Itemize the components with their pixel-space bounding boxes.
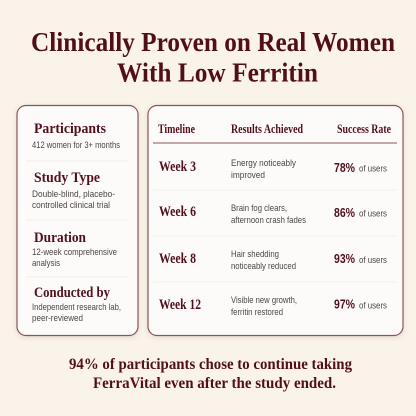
row: week 6: Brain fog clears, — [231, 203, 287, 213]
table header: Success Rate — [337, 122, 391, 136]
duration — [32, 230, 117, 268]
row: week 8: Week 8 — [159, 251, 196, 267]
row: week 12: Week 12 — [159, 297, 201, 313]
row: week 8: noticeably reduced — [231, 261, 296, 271]
table header: Timeline — [158, 122, 195, 136]
row: week 8: Hair shedding — [231, 249, 279, 259]
study type: Study Type — [34, 170, 101, 186]
row: week 12: Visible new growth, — [231, 295, 297, 305]
row: week 6: Week 6 — [159, 204, 196, 220]
row: week 12: 97% — [334, 298, 355, 312]
footer callout: FerraVital even after the study ended. — [93, 375, 336, 392]
row: week 3: of users — [359, 164, 387, 174]
table header — [158, 122, 391, 136]
row: week 8: of users — [359, 255, 387, 265]
conducted by: peer-reviewed — [32, 313, 83, 323]
row: week 8 — [159, 249, 387, 271]
participants — [32, 121, 120, 150]
title: With Low Ferritin — [117, 56, 318, 88]
conducted by — [32, 285, 121, 323]
participants: 412 women for 3+ months — [32, 140, 120, 150]
duration: 12-week comprehensive — [32, 247, 117, 257]
duration: Duration — [34, 230, 86, 246]
row: week 6: of users — [359, 208, 387, 218]
row: week 3: 78% — [334, 161, 355, 175]
panel: study details — [17, 106, 138, 336]
participants: Participants — [34, 121, 106, 137]
row: week 12: of users — [359, 300, 387, 310]
footer callout: 94% of participants chose to continue taking — [69, 356, 352, 373]
duration: analysis — [32, 258, 60, 268]
row: week 6 — [159, 203, 387, 225]
footer callout — [69, 356, 352, 392]
row: week 8: 93% — [334, 252, 355, 266]
study type: controlled clinical trial — [32, 200, 110, 210]
study type: Double-blind, placebo- — [32, 189, 115, 199]
row: week 3: Energy noticeably — [231, 158, 296, 168]
row: week 6: 86% — [334, 206, 355, 220]
conducted by: Independent research lab, — [32, 302, 121, 312]
title — [31, 26, 395, 88]
row: week 3: Week 3 — [159, 159, 196, 175]
row: week 3 — [159, 158, 387, 180]
row: week 12: ferritin restored — [231, 307, 283, 317]
title: Clinically Proven on Real Women — [31, 26, 395, 57]
row: week 12 — [159, 295, 387, 317]
conducted by: Conducted by — [34, 285, 111, 301]
table header: Results Achieved — [231, 122, 303, 136]
row: week 6: afternoon crash fades — [231, 215, 306, 225]
row: week 3: improved — [231, 170, 265, 180]
study type — [32, 170, 115, 210]
panel: results table — [148, 106, 403, 336]
